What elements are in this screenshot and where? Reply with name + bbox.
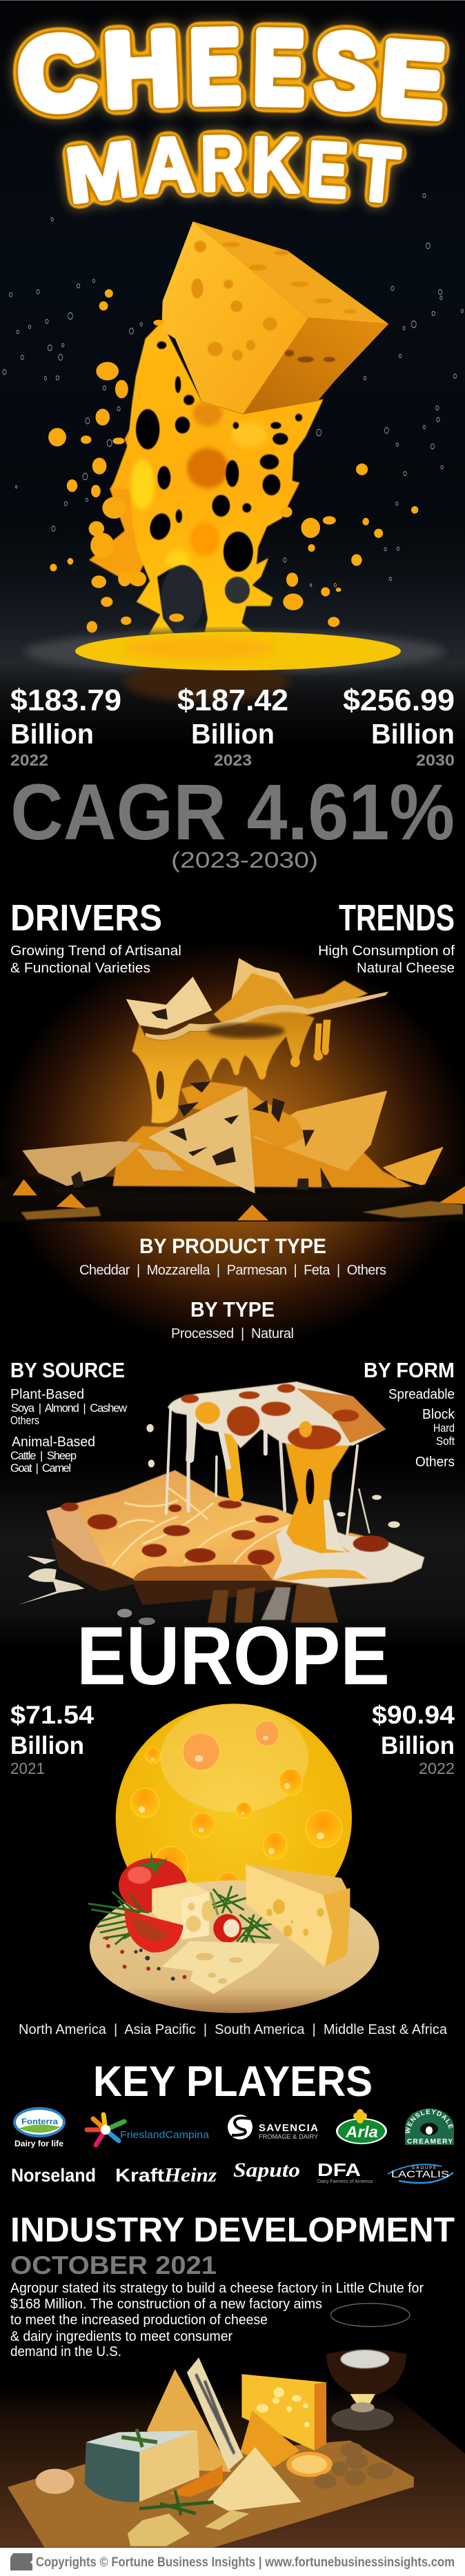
year 2030: 2030 <box>416 751 455 769</box>
arc path <box>410 2114 450 2134</box>
wedge rind <box>324 1888 350 1967</box>
CHEESE: E <box>377 21 448 139</box>
green swoosh <box>19 2124 61 2133</box>
block: Block <box>422 1406 455 1422</box>
logo: FrieslandCampina <box>87 2115 210 2145</box>
reflection strands <box>208 1584 338 1623</box>
badge inner <box>338 2119 385 2143</box>
nachos glow <box>0 941 465 1348</box>
key players heading: KEY PLAYERS <box>93 2058 373 2106</box>
cheese shreds <box>112 1486 290 1566</box>
spreadable: Spreadable <box>388 1386 455 1402</box>
slice centre <box>292 2455 327 2474</box>
logo: Lactalis <box>388 2164 453 2183</box>
slice holes <box>196 1953 242 1984</box>
plant others: Others <box>10 1415 39 1427</box>
value 2023: $187.42 <box>177 683 288 717</box>
arc text: WENSLEYDALE <box>405 2109 454 2133</box>
cow face <box>426 2126 433 2135</box>
yellow block side <box>315 2382 326 2450</box>
cheese slices <box>161 1941 280 1994</box>
trends line 2: Natural Cheese <box>357 960 455 976</box>
front chip <box>148 1087 255 1193</box>
MARKET: M <box>61 125 143 219</box>
table <box>0 1177 465 1221</box>
tomato wedge seeds <box>132 1917 169 1941</box>
logo: Norseland: Norseland <box>11 2165 96 2186</box>
by source heading: BY SOURCE <box>10 1358 125 1382</box>
hero background <box>0 0 465 745</box>
herb sprig top <box>121 2429 157 2447</box>
logo: DFA <box>317 2159 373 2184</box>
herb sprigs <box>89 1886 273 1950</box>
dangling drops <box>258 1019 330 1079</box>
cheese pull strands <box>166 1408 369 1535</box>
line 3: to meet the increased production of cheese <box>10 2313 268 2328</box>
drivers line 1: Growing Trend of Artisanal <box>10 943 181 959</box>
line 2: $168 Million. The construction of a new factory aims <box>10 2297 322 2312</box>
emblem <box>228 2115 253 2139</box>
animal-based: Animal-Based <box>12 1434 95 1450</box>
large cheese wedge side <box>246 1864 350 1967</box>
unit 2023: Billion <box>191 718 275 750</box>
development text <box>10 2281 424 2359</box>
date heading: OCTOBER 2021 <box>10 2251 217 2279</box>
value 2022: $183.79 <box>10 683 121 717</box>
title: CHEESE MARKET <box>15 10 448 219</box>
value: $71.54 <box>10 1701 94 1729</box>
name: SAVENCIA <box>259 2122 318 2134</box>
groupe: GROUPE <box>412 2166 436 2170</box>
cheese blobs <box>117 1424 400 1625</box>
puddle reflection <box>124 661 290 702</box>
melt highlights and shading <box>130 401 267 570</box>
cheese block side face <box>244 318 388 414</box>
year: 2022 <box>419 1759 455 1777</box>
market size 2022 <box>10 683 121 769</box>
glass rim <box>330 2304 410 2326</box>
illustration: cheese board with glass <box>0 2304 465 2548</box>
top cheese topping <box>214 973 368 1026</box>
tomato highlight <box>128 1866 151 1884</box>
blue streaks <box>196 2374 235 2454</box>
CHEESE: C <box>15 14 99 133</box>
far right chip <box>383 1147 444 1186</box>
front small chip <box>137 1148 184 1171</box>
top left chip <box>126 977 212 1029</box>
cube holes <box>186 1901 214 1932</box>
lifted slice orange melt <box>195 1402 312 1437</box>
hard: Hard <box>433 1422 455 1435</box>
by form heading: BY FORM <box>364 1358 455 1382</box>
by type list: Processed | Natural <box>171 1326 294 1341</box>
spilled cream left <box>18 1556 85 1605</box>
trends block <box>318 897 455 976</box>
name: Fonterra <box>21 2117 58 2126</box>
wedge holes <box>266 1899 324 1937</box>
star core <box>101 2125 110 2135</box>
puddle centre <box>124 637 276 659</box>
flower <box>353 2109 367 2124</box>
creamery: CREAMERY <box>407 2138 453 2146</box>
yellow block cheese <box>241 2374 326 2450</box>
unit: Billion <box>381 1731 455 1759</box>
MARKET: R <box>200 120 244 207</box>
inner <box>16 2110 63 2135</box>
floating droplets specks <box>3 194 464 587</box>
line 5: demand in the U.S. <box>10 2344 121 2359</box>
left round slice <box>36 2468 75 2494</box>
CHEESE: H <box>102 11 181 128</box>
tomato stem <box>137 1851 168 1875</box>
pizza shadow and lower crust <box>50 1538 297 1605</box>
cheese block top face <box>193 221 388 324</box>
cheese cube face <box>181 1893 209 1939</box>
lifted crust edge <box>297 1388 386 1443</box>
column gap <box>306 1469 314 1504</box>
tomato wedge <box>125 1910 184 1953</box>
melted white cheese right <box>273 1517 424 1587</box>
year 2022: 2022 <box>10 751 48 769</box>
glass base <box>331 2407 394 2430</box>
name: Arla <box>345 2123 378 2141</box>
nuts <box>314 2442 393 2488</box>
CAGR period: (2023-2030) <box>171 848 318 872</box>
plant-based list: Soya | Almond | Cashew <box>11 1402 127 1415</box>
CHEESE: E <box>189 10 241 124</box>
unit: Billion <box>10 1731 84 1759</box>
MARKET: K <box>251 121 300 208</box>
CHEESE: S <box>314 13 378 129</box>
others: Others <box>415 1454 455 1470</box>
pizza base slice <box>47 1470 424 1587</box>
illustration: cheese moon and board <box>89 1704 379 2013</box>
name: FrieslandCampina <box>120 2129 210 2141</box>
value 2030: $256.99 <box>343 683 455 717</box>
value: $90.94 <box>372 1701 455 1729</box>
by product type heading: BY PRODUCT TYPE <box>139 1234 326 1258</box>
top arc <box>388 2164 442 2174</box>
table crumbs <box>21 1201 463 1219</box>
year 2023: 2023 <box>214 751 252 769</box>
glass bowl <box>326 2349 406 2397</box>
column white edge <box>324 1500 347 1552</box>
Europe value 2022 <box>372 1701 455 1777</box>
line 4: & dairy ingredients to meet consumer <box>10 2329 232 2344</box>
line 1: Agropur stated its strategy to build a cheese factory in Little Chute for <box>10 2281 424 2296</box>
underside shade <box>208 1024 285 1039</box>
CHEESE <box>15 10 448 139</box>
back splatter behind cheese <box>89 347 155 585</box>
plant-based: Plant-Based <box>10 1386 84 1402</box>
footer band <box>0 2548 465 2576</box>
cheese block front face <box>161 221 308 414</box>
blue cheese rind <box>85 2442 139 2502</box>
base light <box>350 2402 375 2413</box>
puddle dust ring <box>24 631 445 672</box>
shredded cheese <box>128 2510 249 2546</box>
emblem S <box>232 2118 250 2135</box>
footer logo <box>10 2553 32 2570</box>
heinz: Heinz <box>164 2165 217 2186</box>
footer <box>0 2548 465 2576</box>
blue cheese top <box>86 2430 197 2452</box>
by source block <box>10 1358 127 1475</box>
back right chip <box>253 1090 387 1171</box>
crust edge left <box>47 1503 107 1566</box>
industry development heading: INDUSTRY DEVELOPMENT <box>10 2210 455 2249</box>
tagline: FROMAGE & DAIRY <box>259 2133 319 2141</box>
logo: KraftHeinz <box>115 2165 217 2186</box>
drivers line 2: & Functional Varieties <box>10 960 150 976</box>
drip holes <box>157 1071 164 1099</box>
logo: Fonterra <box>13 2107 66 2148</box>
melted cheese holes <box>136 341 302 630</box>
top right chip <box>228 958 295 1016</box>
melted cheese body <box>111 322 324 646</box>
first triangle cheese <box>147 2369 231 2472</box>
cheese cube <box>152 1881 209 1939</box>
soft: Soft <box>436 1435 455 1448</box>
moon holes <box>130 1721 342 1898</box>
year: 2021 <box>10 1759 45 1777</box>
lifted slice sauce patches <box>181 1384 359 1450</box>
hero illustration: melting cheese <box>3 194 464 646</box>
by type heading: BY TYPE <box>190 1297 275 1321</box>
far left chip <box>22 1141 142 1186</box>
by product type list: Cheddar | Mozzarella | Parmesan | Feta | Others <box>79 1263 386 1278</box>
cheese puddle on floor <box>24 631 445 702</box>
trends line 1: High Consumption of <box>318 943 455 959</box>
top tortilla edge <box>146 992 388 1040</box>
cheese block surface dimples <box>191 241 357 392</box>
wedge top <box>246 1864 350 1895</box>
CHEESE: E <box>253 10 305 125</box>
MARKET: T <box>354 129 403 219</box>
yellow cheese flow <box>276 1569 368 1581</box>
unit 2030: Billion <box>371 718 455 750</box>
illustration: nachos with melted cheese <box>0 958 465 1221</box>
name: LACTALIS <box>391 2168 449 2179</box>
shredded cheese centre <box>181 1081 306 1148</box>
blue streak triangle <box>187 2357 244 2470</box>
pizza front crust <box>134 1565 273 1581</box>
hole glints <box>139 1736 324 1854</box>
illustration: pizza with cheese pull <box>18 1381 424 1625</box>
cheese dollops <box>12 1179 465 1221</box>
cheese mound base <box>112 1126 415 1188</box>
bottom arc <box>399 2173 453 2183</box>
ring <box>13 2107 66 2137</box>
unit 2022: Billion <box>10 718 94 750</box>
glass stem <box>350 2394 375 2407</box>
flying cheese drops <box>48 289 418 632</box>
badge <box>405 2108 454 2145</box>
peppercorns <box>105 1936 186 1981</box>
tagline: Dairy for life <box>14 2139 63 2148</box>
badge <box>336 2118 387 2144</box>
regions list: North America | Asia Pacific | South America | Middle East & Africa <box>19 2022 448 2037</box>
cheese moon <box>116 1704 352 1933</box>
orange wedge <box>240 2410 299 2467</box>
pizza floor <box>0 1462 465 1648</box>
moon highlight <box>160 1704 308 1813</box>
chili pepper <box>213 1914 241 1943</box>
crumbly wedge <box>208 2447 301 2511</box>
MARKET <box>61 120 403 219</box>
Europe heading: EUROPE <box>77 1610 390 1702</box>
chili stem <box>210 1893 218 1915</box>
logo: Savencia <box>228 2115 319 2141</box>
market size 2023 <box>177 683 288 769</box>
cow <box>420 2123 438 2135</box>
main cheese column <box>285 1440 353 1553</box>
top edge line <box>0 0 465 1</box>
market size 2030 <box>343 683 455 769</box>
MARKET: E <box>306 126 350 214</box>
drivers block <box>10 897 181 976</box>
drivers heading: DRIVERS <box>10 897 162 939</box>
full name: Dairy Farmers of America <box>317 2179 373 2184</box>
by form block <box>364 1358 455 1470</box>
lower herbs <box>139 2490 214 2515</box>
carrot <box>169 2466 223 2497</box>
MARKET: A <box>141 121 196 209</box>
logo: Saputo: Saputo <box>233 2159 300 2181</box>
chili cut <box>224 1919 239 1937</box>
lifted pizza slice <box>168 1381 386 1448</box>
wooden board <box>90 1880 379 2013</box>
block holes <box>257 2388 310 2427</box>
letters: DFA <box>317 2159 361 2180</box>
Europe value 2021 <box>10 1701 94 1777</box>
star <box>87 2115 124 2145</box>
cutting board <box>8 2441 414 2548</box>
hanging cheese drips <box>132 1013 315 1124</box>
chip seasoning flecks <box>71 1008 333 1190</box>
logo: Wensleydale Creamery <box>405 2108 454 2146</box>
pizza toppings <box>61 1500 388 1565</box>
animal list 2: Goat | Camel <box>10 1462 71 1475</box>
puddle <box>75 632 401 670</box>
round slice <box>286 2452 333 2477</box>
blue cheese cut <box>139 2430 199 2502</box>
wooden table <box>0 2388 465 2548</box>
kraft: Kraft <box>115 2165 164 2186</box>
plate <box>49 1184 427 1210</box>
glass reflection <box>341 2350 389 2368</box>
tomato <box>119 1858 187 1913</box>
logo: Arla <box>336 2109 387 2144</box>
animal list 1: Cattle | Sheep <box>10 1450 77 1462</box>
